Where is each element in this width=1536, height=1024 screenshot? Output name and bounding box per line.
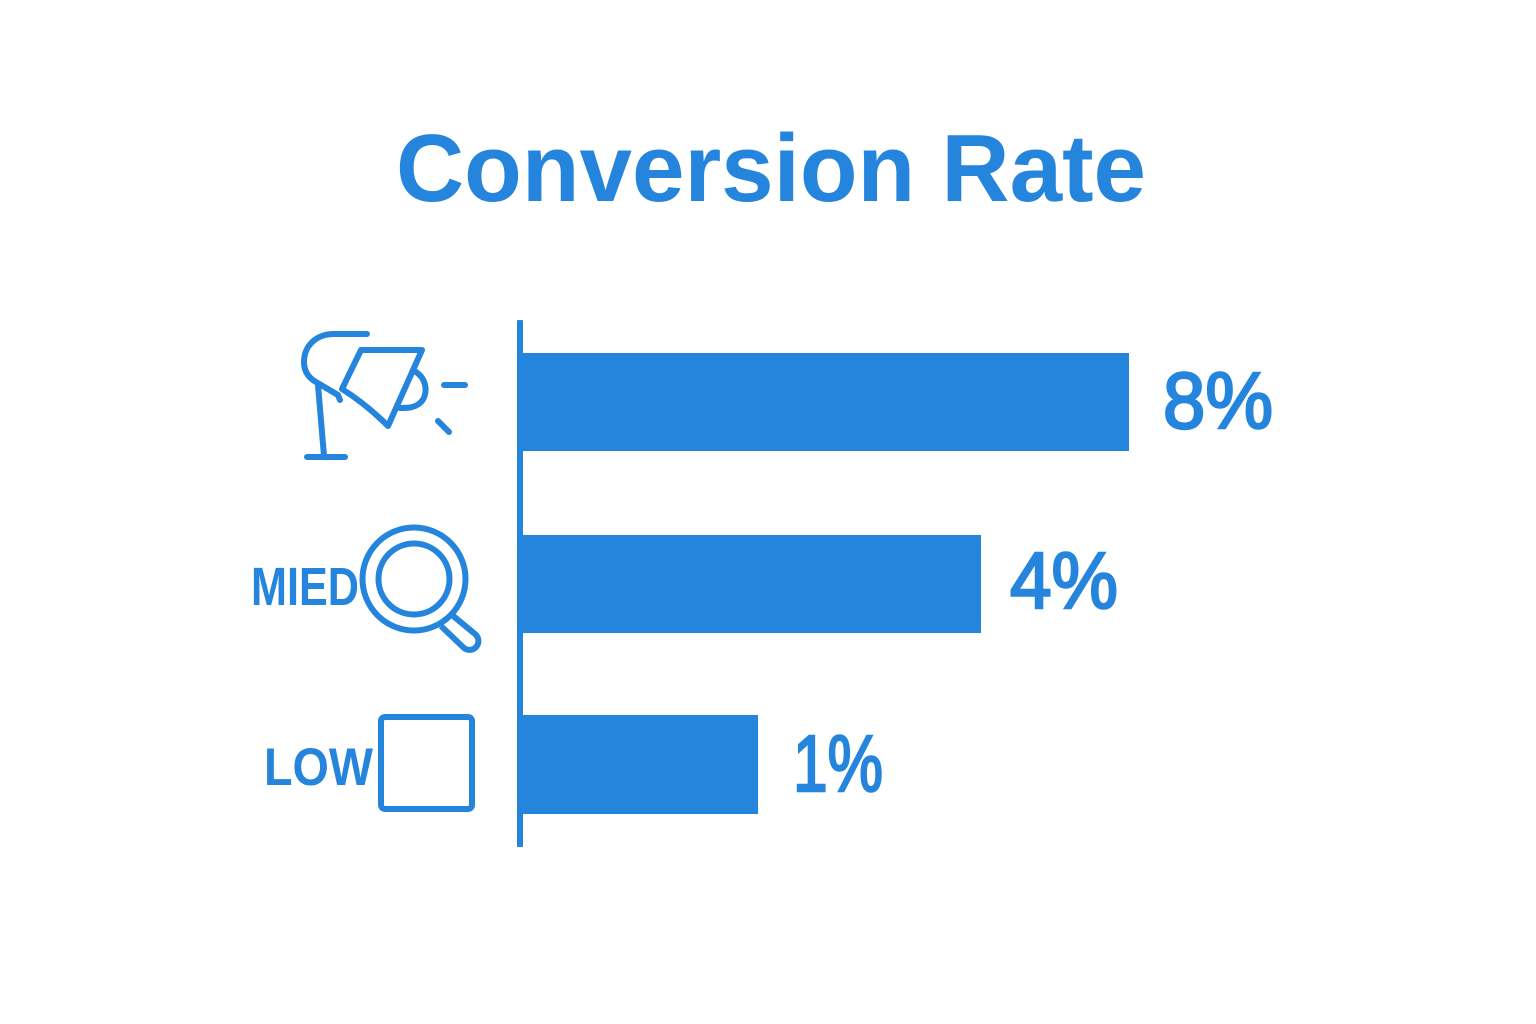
label: LOW: LOW [264,738,373,797]
icon: empty square [381,717,472,809]
icon: megaphone on stand [304,334,465,457]
value: 1%: 1% [793,719,883,808]
bar: high 8% [522,353,1129,451]
icon: magnifying glass [362,528,478,650]
label: MIED: MIED [251,557,359,617]
chart axis [517,320,523,847]
title: Conversion Rate [396,115,1146,222]
value: 8%: 8% [1163,356,1273,445]
bar: medium 4% [522,535,981,633]
bar: low 1% [522,715,758,814]
value: 4%: 4% [1010,536,1118,625]
